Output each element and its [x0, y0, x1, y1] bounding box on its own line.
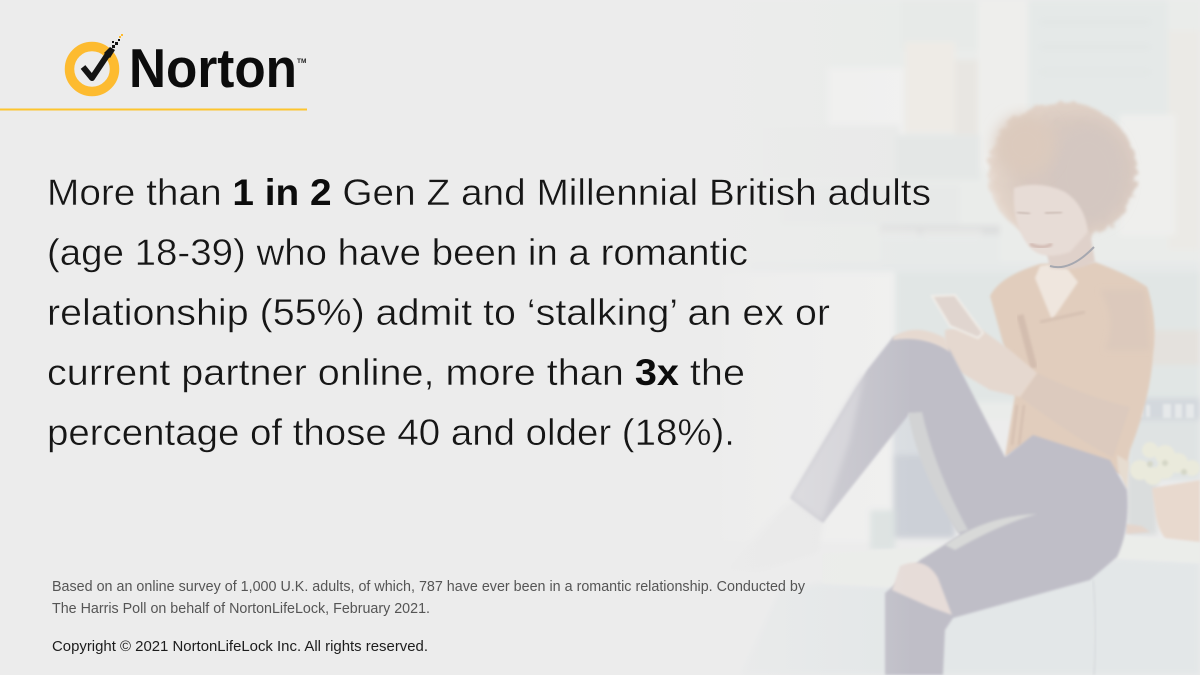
woman's legs	[790, 330, 1128, 675]
wordmark: Norton	[129, 37, 297, 99]
woman's torso and arm	[945, 262, 1155, 490]
wordmark: TM	[297, 58, 306, 65]
main statement text: current partner online, more than 3x the	[47, 352, 745, 393]
survey footnote: Based on an online survey of 1,000 U.K. adults, of which, 787 have ever been in a romantic relationship. Conducted by	[52, 579, 806, 595]
city skyline	[700, 0, 1200, 550]
main statement text: (age 18-39) who have been in a romantic	[47, 232, 748, 273]
logo underline	[0, 108, 307, 110]
wall ledge	[740, 535, 1200, 675]
main statement text: More than 1 in 2 Gen Z and Millennial British adults	[47, 172, 931, 213]
Norton logo	[0, 34, 307, 110]
plant pot and flowers	[1126, 442, 1200, 542]
sign text in background	[1139, 404, 1194, 418]
copyright line: Copyright © 2021 NortonLifeLock Inc. All rights reserved.	[52, 639, 428, 655]
shoe and sock	[725, 498, 823, 572]
woman's hair	[987, 102, 1137, 242]
survey footnote: The Harris Poll on behalf of NortonLifeLock, February 2021.	[52, 601, 430, 617]
survey footnote	[52, 579, 806, 617]
main statement text: relationship (55%) admit to ‘stalking’ an ex or	[47, 292, 830, 333]
main statement text: percentage of those 40 and older (18%).	[47, 412, 735, 453]
icon: check mark ring	[70, 34, 123, 92]
phone	[932, 295, 983, 338]
woman's face and neck	[1014, 185, 1095, 269]
main statement text	[47, 172, 931, 453]
